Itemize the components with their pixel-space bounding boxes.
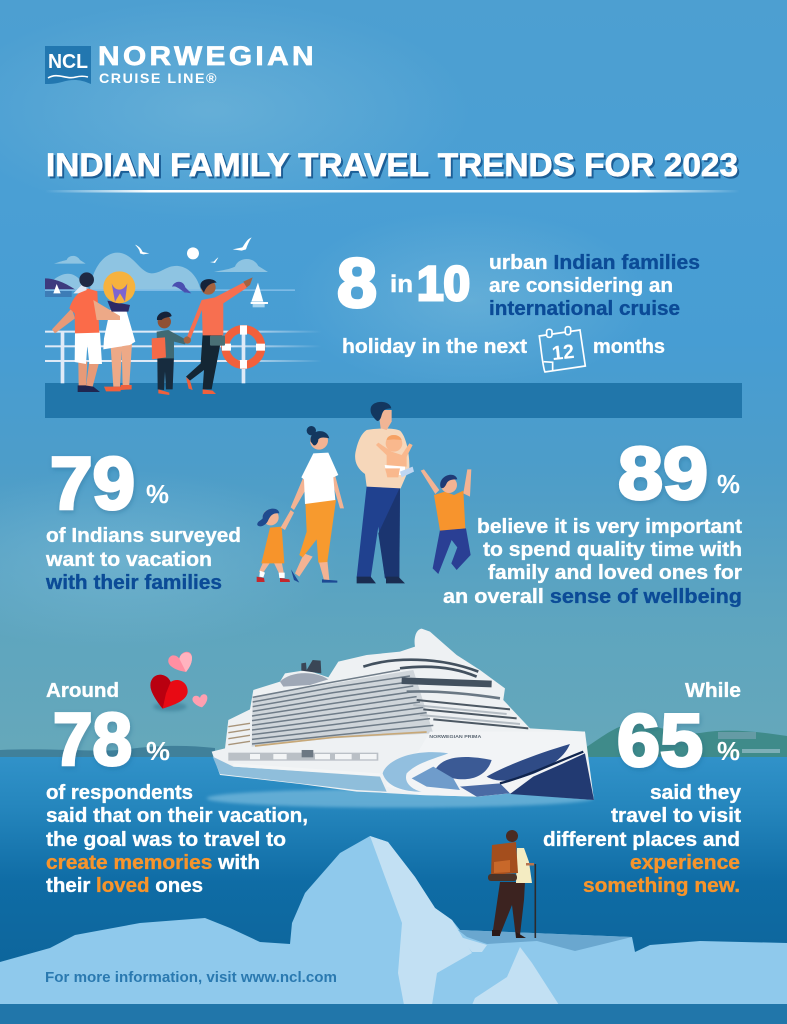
statement text xyxy=(342,252,700,358)
stat: 79 percent xyxy=(45,442,241,594)
jumping boy xyxy=(421,469,471,574)
logo wordmark: NORWEGIAN xyxy=(98,41,317,71)
cruise ship Norwegian Prima xyxy=(207,629,594,808)
word While: While xyxy=(685,680,741,702)
percent sign: % xyxy=(717,469,740,499)
numeral 10: 10 xyxy=(417,258,470,311)
backpack xyxy=(491,842,518,875)
shirt xyxy=(516,848,532,883)
father holding baby xyxy=(355,402,414,583)
description: of Indians surveyed xyxy=(46,525,241,547)
dolphin xyxy=(172,282,191,293)
percent sign: % xyxy=(717,736,740,766)
sea xyxy=(0,757,787,1007)
stat: 8 in 10 xyxy=(337,244,700,372)
percent sign: % xyxy=(146,479,169,509)
pink heart top xyxy=(168,652,192,672)
bow art swirls xyxy=(383,744,583,797)
trekking pole xyxy=(534,864,536,938)
father pointing xyxy=(186,277,253,394)
hiker with backpack xyxy=(488,830,536,938)
stat: 89 percent xyxy=(443,432,742,608)
family illustration xyxy=(257,402,471,583)
logo sub-wordmark: CRUISE LINE® xyxy=(99,70,218,86)
statement text: international cruise xyxy=(489,298,680,320)
logo flag letters: NCL xyxy=(48,51,88,73)
purple island xyxy=(45,278,75,289)
title: INDIAN FAMILY TRAVEL TRENDS FOR 2023 xyxy=(46,147,738,183)
word Around: Around xyxy=(46,680,119,702)
description: of respondents xyxy=(46,782,193,804)
description: their loved ones xyxy=(46,875,203,897)
description: something new. xyxy=(583,875,740,897)
statement text: are considering an xyxy=(489,275,673,297)
percent sign: % xyxy=(146,736,170,766)
description: travel to visit xyxy=(611,805,741,827)
statement text: holiday in the next xyxy=(342,336,527,358)
woman with sun hat xyxy=(93,271,135,391)
description: the goal was to travel to xyxy=(46,829,286,851)
baby xyxy=(376,435,414,477)
stat: 65 percent xyxy=(543,680,742,897)
right distant island xyxy=(585,723,787,757)
description: said that on their vacation, xyxy=(46,805,308,827)
aft stack of decks xyxy=(228,723,250,745)
description xyxy=(543,782,742,897)
rail posts xyxy=(61,327,245,383)
decorative paper hearts xyxy=(150,652,207,711)
logo flag wave xyxy=(48,76,88,78)
description: to spend quality time with xyxy=(483,539,742,561)
footer note: For more information, visit www.ncl.com xyxy=(45,970,337,986)
bridge windows xyxy=(363,660,528,728)
sun xyxy=(187,247,199,259)
ship body xyxy=(212,629,594,800)
logo: Norwegian Cruise Line xyxy=(45,41,317,86)
birds xyxy=(135,237,252,263)
pink heart small xyxy=(192,694,207,707)
lifeboats xyxy=(250,754,377,759)
sailboat right xyxy=(251,283,268,307)
lifeboat deck xyxy=(228,750,378,761)
78 numeral: 78 xyxy=(53,698,132,781)
word in: in xyxy=(390,271,413,298)
lifebuoy xyxy=(222,325,265,369)
large red heart xyxy=(150,675,188,709)
79 numeral: 79 xyxy=(50,442,135,525)
description xyxy=(46,782,308,897)
iceberg xyxy=(0,836,787,1005)
ship rails xyxy=(45,331,322,362)
bottom band xyxy=(0,1004,787,1024)
statement text: months xyxy=(593,336,665,358)
statement text: urban Indian families xyxy=(489,252,700,274)
stat: 78 percent xyxy=(46,680,308,897)
89 numeral: 89 xyxy=(618,432,708,515)
icon: calendar xyxy=(539,327,585,372)
funnels xyxy=(301,660,321,673)
legs xyxy=(493,882,525,938)
child with backpack xyxy=(152,312,191,395)
mother xyxy=(291,426,344,583)
navy hull xyxy=(510,753,594,800)
description: said they xyxy=(650,782,742,804)
logo flag xyxy=(45,46,91,84)
description: experience xyxy=(630,852,740,874)
icon: calendar: 12 xyxy=(551,341,575,365)
deck band xyxy=(45,383,742,418)
superstructure stripes xyxy=(252,670,433,747)
dome xyxy=(280,673,328,687)
man from behind xyxy=(52,272,102,392)
left distant island xyxy=(0,746,215,758)
iceberg ledge xyxy=(458,930,632,951)
little girl xyxy=(257,509,294,582)
description: an overall sense of wellbeing xyxy=(443,586,742,608)
head xyxy=(506,830,518,842)
sky background xyxy=(0,0,787,760)
description: believe it is very important xyxy=(477,516,742,538)
numeral 8: 8 xyxy=(337,244,377,322)
ship name: NORWEGIAN PRIMA xyxy=(429,734,482,739)
description: family and loved ones for xyxy=(488,562,742,584)
65 numeral: 65 xyxy=(617,699,703,782)
description xyxy=(443,516,742,608)
description: want to vacation xyxy=(45,549,212,571)
description: create memories with xyxy=(46,852,260,874)
iceberg lit facet xyxy=(370,836,472,1005)
description xyxy=(45,525,241,594)
soft cloud glow xyxy=(0,0,650,650)
small sailboat xyxy=(53,284,61,293)
description: different places and xyxy=(543,829,740,851)
distant hills and clouds xyxy=(53,253,268,290)
hull line art xyxy=(213,757,387,792)
bow white xyxy=(387,732,587,797)
deck illustration: family on cruise ship xyxy=(45,237,322,395)
description: with their families xyxy=(45,572,222,594)
